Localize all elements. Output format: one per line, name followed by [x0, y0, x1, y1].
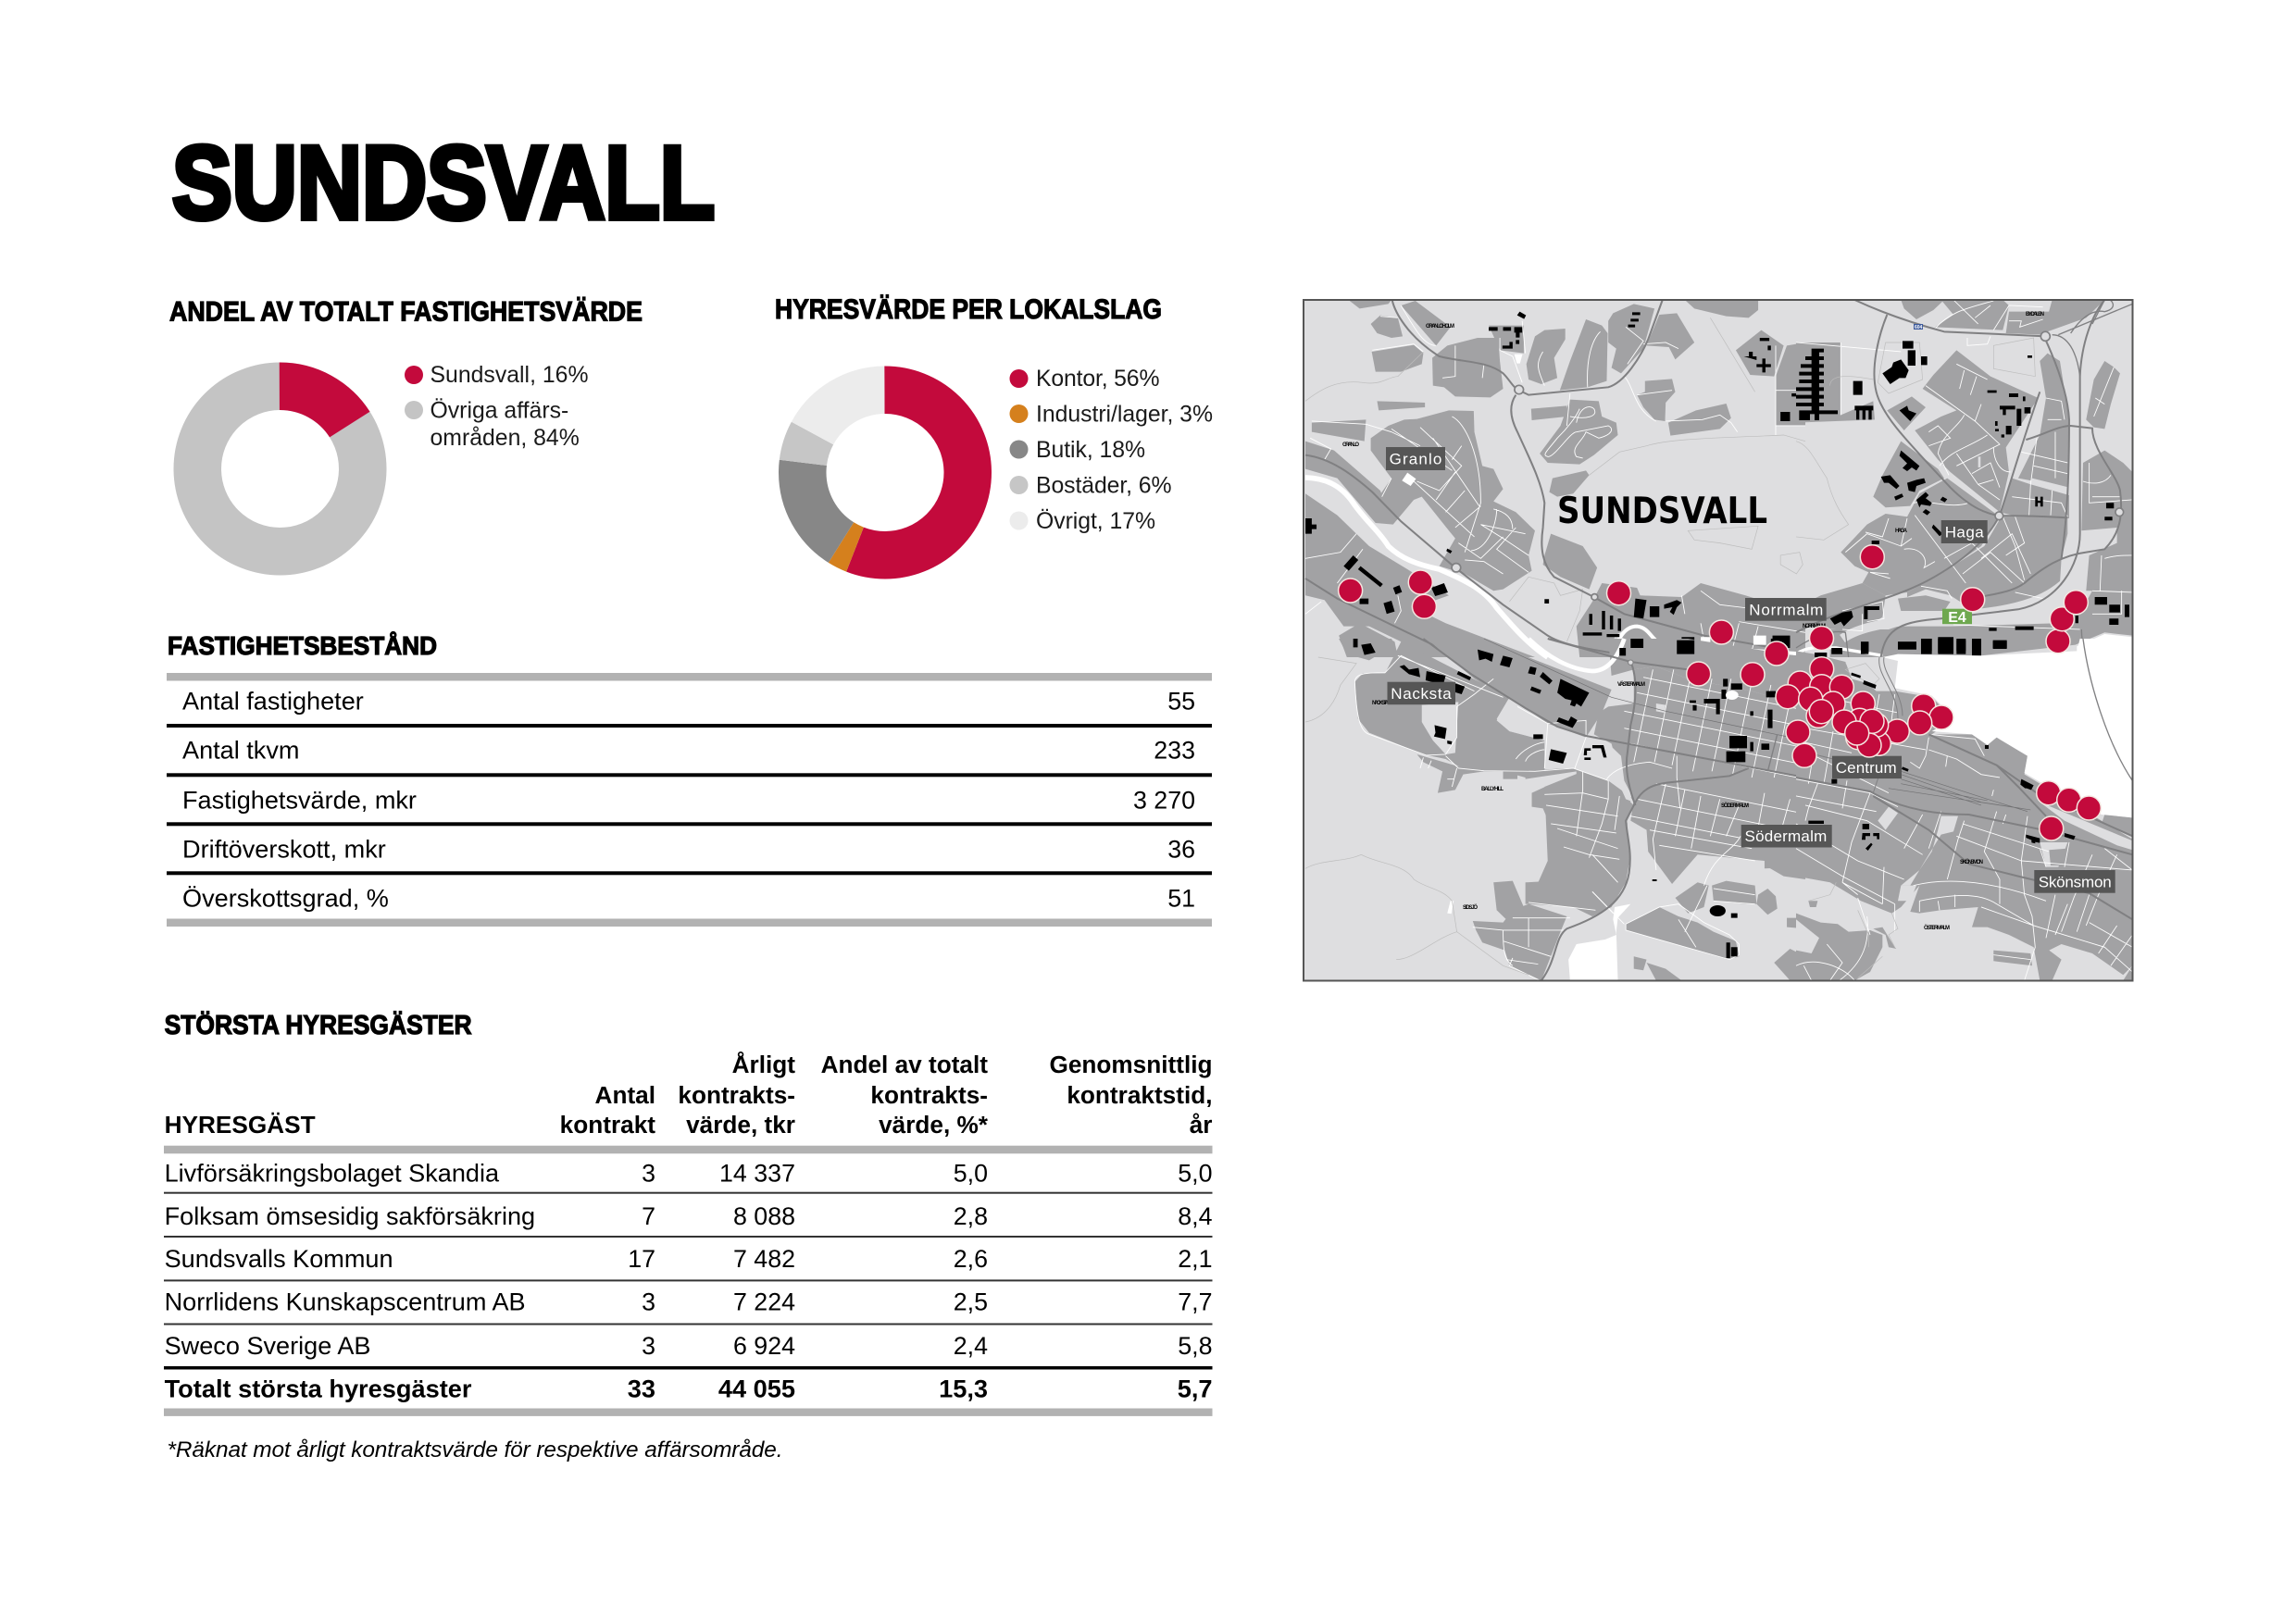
map: small place names: SÖDERMALM: [1721, 803, 1749, 809]
table: fastighetsbestånd: Överskottsgrad, %: [182, 883, 389, 913]
map quadrant: north-east: [1796, 299, 2132, 657]
table: största hyresgäster: Sweco Sverige AB: [165, 1331, 370, 1360]
table: största hyresgäster: 44 055: [718, 1374, 795, 1402]
table: fastighetsbestånd: 51: [1167, 885, 1195, 913]
map: small place names: VÄSTERMALM: [1617, 681, 1645, 688]
table: största hyresgäster: Norrlidens Kunskapscentrum AB: [165, 1288, 526, 1316]
table: fastighetsbestånd: Fastighetsvärde, mkr: [182, 785, 417, 814]
map: small place names: BYDALEN: [2026, 312, 2044, 317]
road badge: 604: 604: [1915, 325, 1923, 330]
table header: [165, 1051, 1213, 1139]
heading: största hyresgäster: STÖRSTA HYRESGÄSTER: [165, 1010, 472, 1040]
legend: hyresvärde per lokalslag: Industri/lager, 3%: [1036, 402, 1213, 428]
table: största hyresgäster: Totalt största hyresgäster: [165, 1374, 472, 1402]
table: fastighetsbestånd: Antal tkvm: [182, 735, 299, 765]
map label: Centrum: Centrum: [1836, 759, 1897, 777]
legend: hyresvärde per lokalslag: Övrigt, 17%: [1036, 509, 1155, 534]
panel: map of Sundsvall: [1304, 299, 2133, 981]
table header: kontrakts-: [678, 1081, 795, 1109]
table: största hyresgäster: 3: [642, 1288, 655, 1316]
legend: andel av totalt fastighetsvärde: Sundsvall, 16%: [430, 363, 589, 388]
table header: kontraktstid,: [1067, 1081, 1213, 1109]
map label: Haga: [1941, 520, 1988, 543]
legend: hyresvärde per lokalslag: [1009, 367, 1213, 534]
table header: kontrakts-: [870, 1081, 988, 1109]
map label: Haga: Haga: [1945, 524, 1984, 541]
donut chart: hyresvärde per lokalslag: [803, 390, 967, 555]
table: största hyresgäster: 7,7: [1178, 1288, 1213, 1316]
table: fastighetsbestånd: 233: [1154, 737, 1195, 765]
table header: värde, %*: [879, 1111, 989, 1139]
heading: hyresvärde per lokalslag: HYRESVÄRDE PER LOKALSLAG: [775, 294, 1162, 325]
table: största hyresgäster: 7 482: [733, 1245, 795, 1273]
table: största hyresgäster: 2,8: [954, 1202, 988, 1230]
map: small place names: [1342, 312, 2044, 931]
map label: Centrum: [1832, 756, 1902, 778]
legend: andel av totalt fastighetsvärde: Övriga affärs-: [430, 398, 568, 424]
table: största hyresgäster: 8,4: [1178, 1202, 1213, 1230]
table: största hyresgäster: 15,3: [939, 1374, 988, 1402]
table header: år: [1190, 1111, 1213, 1139]
table: största hyresgäster: 2,4: [954, 1332, 988, 1360]
map quadrant: north-west: [1305, 300, 1805, 657]
table: största hyresgäster: 5,7: [1178, 1374, 1213, 1402]
table: fastighetsbestånd: Driftöverskott, mkr: [182, 835, 386, 864]
table: största hyresgäster: 33: [628, 1374, 655, 1402]
table: största hyresgäster: 3: [642, 1159, 655, 1187]
road badge: E4: E4: [1948, 610, 1966, 626]
footnote: *Räknat mot årligt kontraktsvärde för respektive affärsområde.: [167, 1438, 783, 1462]
table: fastighetsbestånd: 55: [1167, 688, 1195, 716]
map: small place names: SIDSJÖ: [1463, 904, 1478, 911]
title: SUNDSVALL: [172, 125, 715, 241]
table: största hyresgäster: 6 924: [733, 1332, 795, 1360]
road badge: E4: [1942, 609, 1972, 626]
map: small place names: GRANLO: [1342, 442, 1359, 448]
legend: hyresvärde per lokalslag: Kontor, 56%: [1036, 367, 1159, 392]
map markers: properties: [1339, 545, 2101, 840]
table: största hyresgäster: Livförsäkringsbolaget Skandia: [165, 1158, 500, 1187]
table header: Genomsnittlig: [1049, 1051, 1213, 1078]
map label: Nacksta: [1387, 682, 1455, 704]
map label: Granlo: [1386, 447, 1445, 470]
legend: hyresvärde per lokalslag: Butik, 18%: [1036, 438, 1145, 463]
legend: andel av totalt fastighetsvärde: områden, 84%: [430, 426, 580, 451]
table: fastighetsbestånd: [167, 673, 1212, 927]
map: small place names: NORRMALM: [1803, 624, 1826, 629]
table: största hyresgäster: 7: [642, 1202, 655, 1230]
map label: Skönsmon: [2034, 870, 2115, 893]
map label: Skönsmon: Skönsmon: [2039, 874, 2112, 890]
table header: Antal: [595, 1081, 655, 1109]
donut chart: andel av totalt fastighetsvärde: [197, 386, 363, 552]
table: största hyresgäster: Folksam ömsesidig sakförsäkring: [165, 1201, 535, 1230]
table header: kontrakt: [560, 1111, 655, 1139]
map: small place names: SKÖNSMON: [1960, 859, 1983, 865]
table: största hyresgäster: 2,5: [954, 1288, 988, 1316]
table: största hyresgäster: 2,1: [1178, 1245, 1213, 1273]
map title: SUNDSVALL: [1557, 491, 1767, 532]
table: största hyresgäster: 5,0: [954, 1159, 988, 1187]
map quadrant: south-west: [1305, 639, 1805, 980]
table: fastighetsbestånd: Antal fastigheter: [182, 687, 364, 716]
map: small place names: GRANLOHOLM: [1426, 324, 1454, 330]
legend: andel av totalt fastighetsvärde: [405, 363, 589, 451]
map label: Norrmalm: Norrmalm: [1749, 602, 1823, 618]
map border: [1304, 300, 2133, 981]
table: största hyresgäster: 17: [628, 1245, 655, 1273]
map label: Granlo: Granlo: [1390, 450, 1441, 468]
table: största hyresgäster: 5,0: [1178, 1159, 1213, 1187]
map: small place names: NACKSTA: [1372, 701, 1390, 706]
table: största hyresgäster: 14 337: [719, 1159, 795, 1187]
table: största hyresgäster: 5,8: [1178, 1332, 1213, 1360]
map: small place names: BALLYHILL: [1481, 787, 1504, 792]
map label: Nacksta: Nacksta: [1391, 685, 1452, 703]
table header: värde, tkr: [686, 1111, 795, 1139]
table: fastighetsbestånd: 36: [1167, 836, 1195, 864]
table: största hyresgäster: 3: [642, 1332, 655, 1360]
table header: Andel av totalt: [821, 1051, 988, 1078]
table: största hyresgäster: 2,6: [954, 1245, 988, 1273]
legend: hyresvärde per lokalslag: Bostäder, 6%: [1036, 474, 1172, 498]
table: största hyresgäster: 7 224: [733, 1288, 795, 1316]
heading: fastighetsbestånd: FASTIGHETSBESTÅND: [168, 631, 437, 660]
table header: HYRESGÄST: [165, 1111, 316, 1139]
table: största hyresgäster: 8 088: [733, 1202, 795, 1230]
table: fastighetsbestånd: 3 270: [1133, 786, 1195, 814]
table: största hyresgäster: [164, 1051, 1213, 1416]
map quadrant: south-east: [1796, 639, 2132, 980]
map: small place names: HAGA: [1895, 529, 1908, 534]
table header: Årligt: [732, 1051, 795, 1078]
table: största hyresgäster: Sundsvalls Kommun: [165, 1244, 393, 1273]
heading: andel av totalt fastighetsvärde: ANDEL AV TOTALT FASTIGHETSVÄRDE: [169, 297, 643, 328]
map label: Södermalm: Södermalm: [1744, 828, 1827, 845]
map: small place names: ÖSTERMALM: [1924, 925, 1950, 931]
